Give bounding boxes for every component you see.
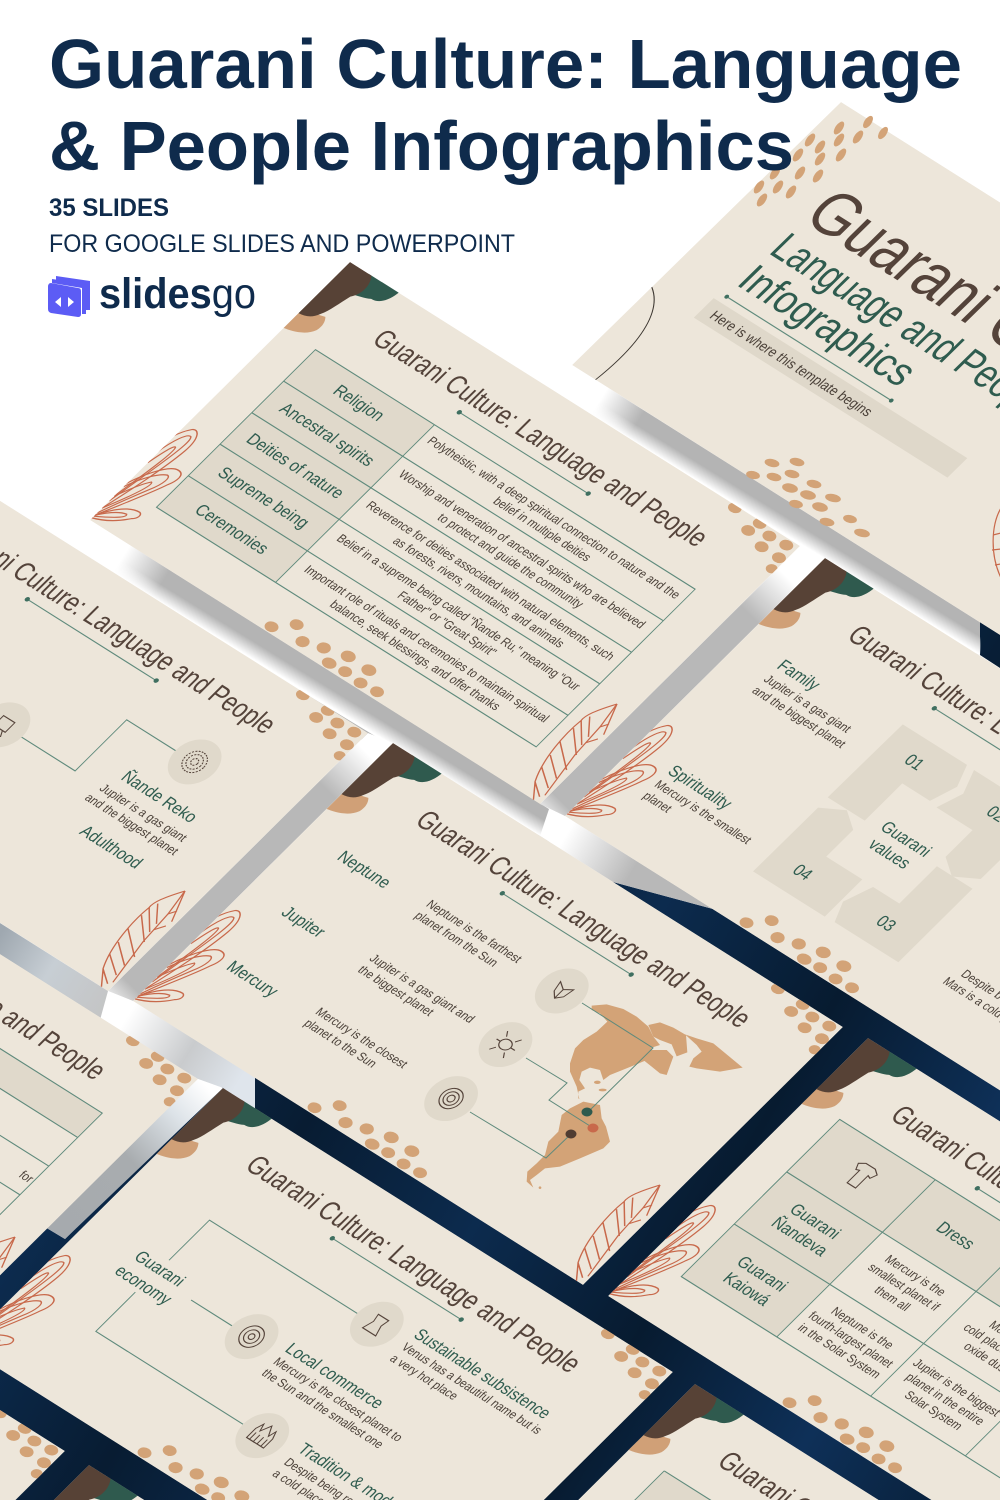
heading: Adulthood (75, 822, 147, 872)
cover edge leaf (992, 508, 1000, 578)
item: local commerce: Mercury is the closest planet to (270, 1355, 406, 1445)
diagram numbers: 04 (788, 861, 817, 884)
corner blobs (284, 262, 399, 333)
slide title: Guarani Culture: Language and People (239, 1149, 589, 1378)
row descriptions: balance, seek blessings, and offer thanks (327, 597, 504, 713)
row labels: Ñandeva (767, 1213, 833, 1260)
icon: textured badge (168, 740, 222, 784)
cover underline (723, 294, 895, 403)
dots right (728, 503, 794, 574)
location descriptions: planet to the Sun (301, 1016, 380, 1070)
dots lower (308, 1100, 427, 1178)
map of the Americas (527, 1004, 743, 1189)
panel: map slide (130, 739, 846, 1286)
table (0, 874, 102, 1280)
slide title: Guarani Culture: Language and People (409, 804, 759, 1033)
item: sustainable subsistence: a very hot place (387, 1352, 462, 1403)
heading: main title: & People Infographics (49, 107, 794, 185)
row labels: Guarani (732, 1252, 792, 1295)
icon: left badge (0, 702, 30, 747)
row labels: Ancestral spirits (275, 399, 379, 470)
title underline (328, 1235, 465, 1323)
root label: Guarani (130, 1247, 190, 1290)
panel: values slide (562, 555, 1000, 1100)
leaf right (0, 1229, 27, 1336)
table: for (16, 1168, 37, 1185)
location descriptions (302, 900, 522, 1068)
row labels (196, 384, 383, 554)
row labels: Deities of nature (242, 430, 349, 502)
row labels: Guarani (785, 1200, 845, 1243)
body text: and the biggest planet (82, 791, 182, 858)
item: local commerce: the Sun and the smallest one (259, 1366, 387, 1451)
panel: bottom right slide (435, 1383, 1000, 1500)
icon: spiral badge (214, 1306, 290, 1368)
panel: economy slide (0, 1084, 676, 1500)
body text: Jupiter is a gas giant (96, 781, 191, 845)
map connector lines (470, 1003, 653, 1158)
cover subtitle: Infographics (728, 257, 927, 395)
item: family (749, 656, 877, 751)
cell texts: planet in the entire (902, 1370, 988, 1428)
logo wordmark: slidesgo (99, 270, 256, 318)
leaf right (532, 704, 618, 800)
cover caption box: Here is where this template begins (706, 307, 877, 419)
cover top dots (752, 114, 890, 208)
table (681, 1119, 1000, 1500)
row descriptions: to protect and guide the community (434, 511, 587, 611)
location descriptions: the biggest planet (355, 963, 438, 1019)
cell texts: Neptune is the (828, 1304, 897, 1352)
dots right (0, 1406, 68, 1480)
dots right (771, 984, 836, 1054)
row labels: Ceremonies (190, 500, 273, 558)
item: sustainable subsistence: Sustainable subsistence (410, 1325, 556, 1423)
item: spirituality: Mercury is the smallest (651, 777, 755, 847)
location names: Mercury (222, 957, 283, 1001)
leaf left (92, 428, 198, 522)
row descriptions: as forests, rivers, mountains, and animals (390, 534, 568, 651)
row labels: Kaiowá (719, 1269, 775, 1310)
title underline (455, 409, 592, 497)
item: sustainable subsistence: Venus has a beautiful name but is (398, 1340, 545, 1437)
diagram numbers: 01 (900, 750, 929, 774)
item: tradition (940, 946, 1000, 1036)
dots right (575, 1327, 676, 1401)
heading: Ñande Reko (117, 767, 202, 826)
values diagram shapes (753, 724, 1000, 963)
location names: Neptune (333, 847, 396, 892)
panel: left table slide (0, 793, 201, 1338)
icon: cathedral badge (224, 1405, 300, 1467)
panel: bottom slide corner (0, 1464, 540, 1500)
item: spirituality: planet (640, 789, 676, 816)
title underline (498, 890, 635, 978)
icon: figure badge (339, 1293, 415, 1355)
item: local commerce (258, 1339, 422, 1456)
cell texts: them all (871, 1283, 914, 1314)
background: navy and shadow bands behind the slides (0, 365, 1000, 1500)
leaf left (564, 719, 690, 833)
dots lower (264, 619, 384, 698)
panel: cover slide (572, 102, 1000, 649)
diagram centre label: Guarani (876, 818, 936, 861)
row labels: Religion (329, 381, 389, 425)
icon: slidesgo logo (48, 276, 90, 317)
item: family: and the biggest planet (749, 684, 850, 751)
diagram numbers (788, 750, 1000, 936)
heading: main title: Guarani Culture: Language (49, 25, 962, 103)
column heading: Dress (932, 1218, 980, 1253)
cell texts (794, 1245, 1000, 1442)
dots right (100, 1034, 201, 1108)
title underline (930, 705, 1000, 792)
dots lower (135, 1433, 271, 1500)
location descriptions: planet from the Sun (411, 909, 502, 969)
row descriptions: Polytheistic, with a deep spiritual connection to nature and the (424, 434, 684, 602)
leaf right (100, 890, 186, 987)
row descriptions (304, 436, 679, 722)
cell texts: Solar System (901, 1388, 966, 1433)
panel: bottom-left slide corner (0, 1165, 68, 1500)
row descriptions: belief in multiple deities (490, 494, 595, 564)
item: family: Family (773, 656, 825, 695)
panel: life stages flow slide (0, 501, 368, 991)
title underline (23, 596, 160, 684)
location descriptions: Mercury is the closest (312, 1005, 412, 1071)
corner blobs (759, 557, 875, 655)
row labels: Supreme being (213, 463, 314, 532)
diagram numbers: 03 (872, 912, 901, 935)
location names (226, 850, 389, 998)
row descriptions: Belief in a supreme being called "Ñande Ru," meaning "Our (333, 531, 584, 693)
cover caption box (694, 298, 967, 478)
dots lower (737, 903, 873, 996)
cover lower dots (745, 457, 871, 539)
item: spirituality (640, 761, 772, 859)
dots lower (780, 1383, 916, 1476)
icon: round pattern badge (413, 1068, 489, 1130)
table (157, 350, 695, 747)
corner blobs (157, 1087, 273, 1185)
item: local commerce: Local commerce (281, 1339, 389, 1413)
leaf left (0, 1249, 88, 1363)
row descriptions: Father" or "Great Spirit" (394, 588, 500, 659)
root label: economy (110, 1261, 177, 1309)
table start (503, 1471, 1000, 1500)
panel: religion table slide (87, 258, 803, 805)
cell texts: fourth-largest planet (805, 1309, 897, 1371)
cell texts: smallest planet if (865, 1260, 944, 1314)
location descriptions: Jupiter is a gas giant and (366, 951, 478, 1026)
leaf left (607, 1199, 733, 1313)
cell texts: in the Solar System (795, 1321, 884, 1381)
dots right (296, 690, 362, 760)
cover arc (595, 286, 655, 380)
row labels (714, 1198, 848, 1313)
item: family: Jupiter is a gas giant (760, 672, 855, 736)
icon: turtle badge (478, 1022, 532, 1067)
location names: Jupiter (277, 903, 330, 941)
icon: shirt (842, 1160, 880, 1191)
icon: bird badge (535, 968, 588, 1014)
corner blobs (23, 1464, 139, 1500)
item: spirituality: Spirituality (663, 761, 737, 813)
subtitle: platforms: FOR GOOGLE SLIDES AND POWERPOINT (49, 230, 515, 258)
slide title: Guarani Culture: Language and People (366, 323, 716, 552)
corner blobs (326, 743, 442, 814)
row descriptions: Reverence for deities associated with natural elements, such (363, 498, 618, 663)
leaf right (576, 1184, 661, 1281)
corner blobs (629, 1383, 745, 1481)
leaf left (134, 910, 241, 1002)
row descriptions: Important role of rituals and ceremonies to maintain spiritual (301, 563, 553, 725)
map pins (566, 1108, 598, 1138)
panel: groups table slide (605, 1035, 1000, 1500)
corner blobs (802, 1037, 918, 1135)
title underline (973, 1185, 1000, 1272)
subtitle: slide count: 35 SLIDES (49, 194, 169, 222)
row descriptions: Worship and veneration of ancestral spirits who are believed (395, 467, 649, 631)
cell texts: Mercury is the (881, 1252, 950, 1299)
connector (21, 719, 176, 772)
diagram centre label: values (864, 835, 915, 873)
location descriptions: Neptune is the farthest (423, 897, 526, 966)
bracket connectors (96, 1220, 358, 1425)
